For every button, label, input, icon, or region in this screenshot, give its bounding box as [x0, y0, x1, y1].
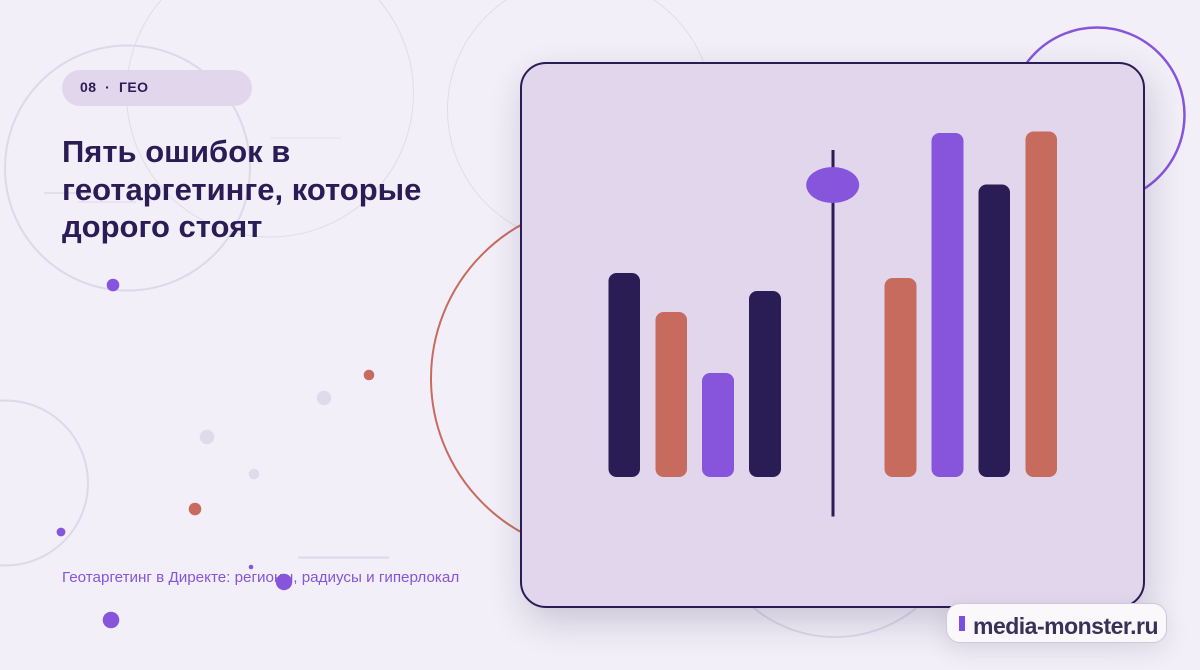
circle: bottom left ring: [0, 400, 88, 566]
subtitle: Геотаргетинг в Директе: регионы, радиусы и гиперлокал: [62, 569, 459, 586]
logo: media-monster.ru: [946, 603, 1167, 643]
circle: coral ring: [431, 202, 783, 554]
dot: small purple left: [57, 528, 65, 536]
badge: 08 · ГЕО: [80, 79, 148, 95]
line: title accent left: [44, 192, 100, 194]
dot: purple bottom: [103, 612, 119, 628]
logo: media-monster.ru: media-monster.ru: [973, 613, 1158, 639]
left bar group: [608, 273, 781, 477]
line: title accent lower: [78, 201, 136, 203]
circle: purple ring top right: [1010, 28, 1184, 202]
dot: coral: [189, 503, 201, 515]
dot: lavender upper: [317, 391, 331, 405]
dot: tiny purple: [249, 565, 253, 569]
title: [62, 134, 421, 244]
dot: lavender middle: [200, 430, 214, 444]
title: Пять ошибок в: [62, 134, 290, 169]
circle: thin ring behind title: [126, 0, 414, 237]
circle: top left lavender ring: [5, 46, 250, 290]
line: upper accent: [270, 137, 341, 139]
circle: ring under panel: [707, 381, 963, 637]
title: дорого стоят: [62, 209, 262, 244]
title: геотаргетинге, которые: [62, 172, 421, 206]
panel: chart background: [520, 62, 1145, 608]
dot: lavender small: [249, 469, 259, 479]
divider line with marker: [806, 150, 859, 516]
dot: coral upper: [364, 370, 374, 380]
line: lower accent: [298, 556, 389, 558]
dot: purple on ring: [107, 279, 119, 291]
circle: thin ring behind panel: [448, 0, 712, 242]
dot: purple over subtitle: [276, 574, 292, 590]
badge: [62, 70, 252, 106]
right bar group: [884, 132, 1057, 477]
